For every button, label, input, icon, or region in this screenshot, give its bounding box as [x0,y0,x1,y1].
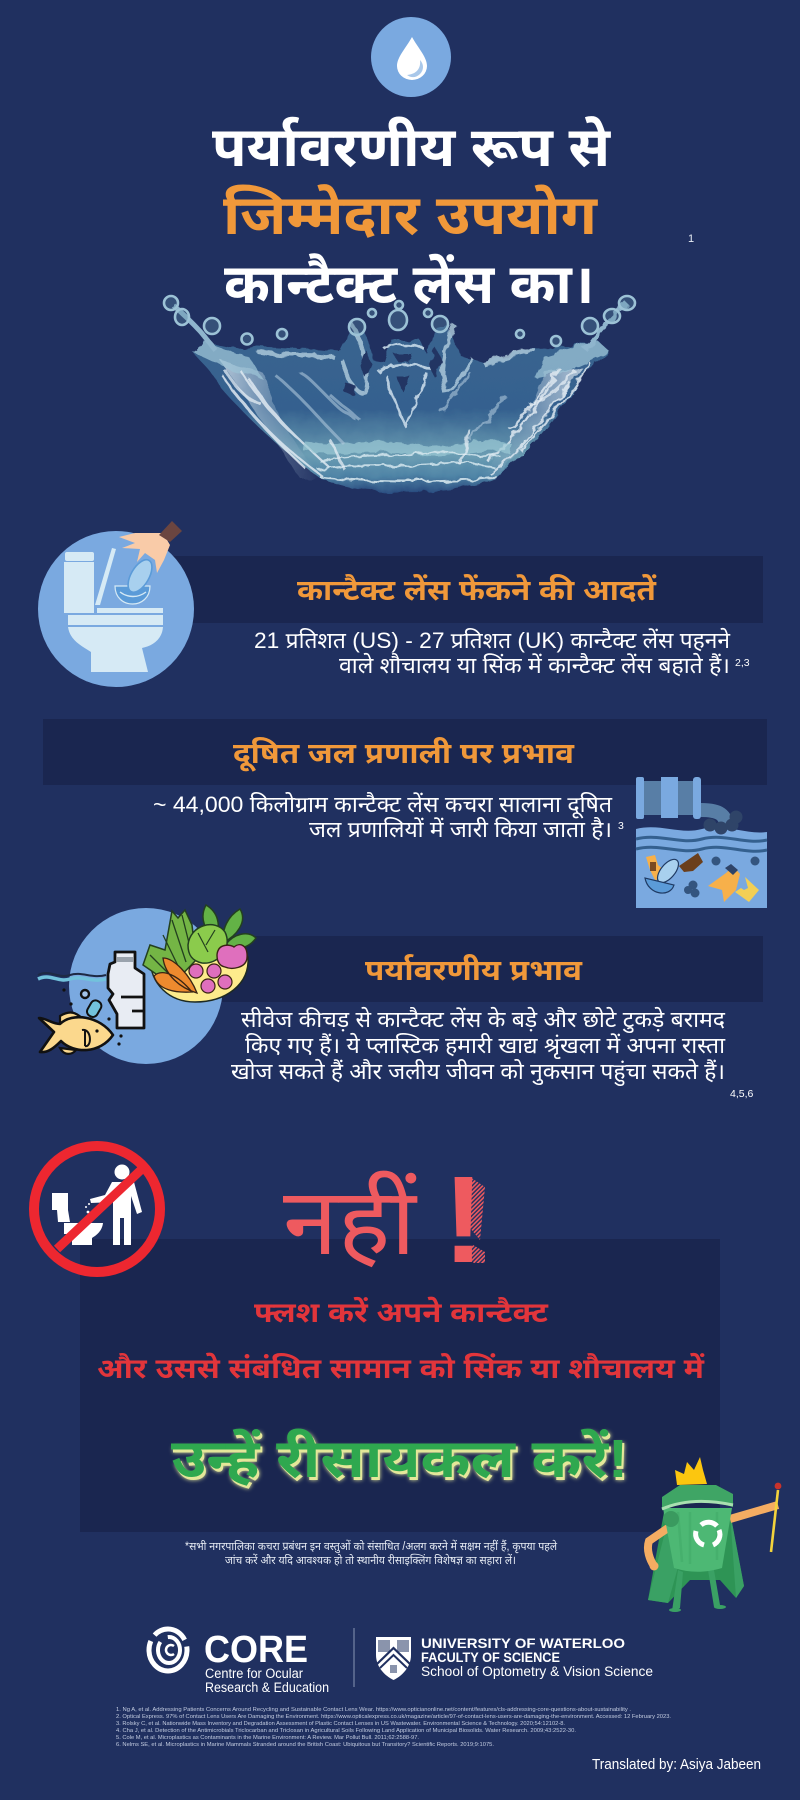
footnote marker 1: 1 [688,233,694,245]
references: 1. Ng A, et al. Addressing Patients Concerns Around Recycling and Sustainable Contact Lens Wear. https://www.opticianonline.net/content/features/cls-addressing-core-questions-about-sustainability . [116,1707,631,1713]
body text [254,627,750,678]
logo subtitle: Research & Education [205,1680,329,1695]
icon: recycling bin mascot [648,1457,781,1612]
heading: no [283,1152,485,1289]
shield crest [376,1637,411,1680]
logo wordmark: CORE [204,1629,308,1671]
icon: sewage pipe and debris [636,777,767,908]
title [212,116,611,315]
footnote disclaimer: *सभी नगरपालिका कचरा प्रबंधन इन वस्तुओं को संसाधित /अलग करने में सक्षम नहीं हैं, कृपया पहले [185,1539,557,1553]
panel: call to action [34,1146,720,1532]
body text [231,1006,754,1100]
image: water splash crown [164,296,635,492]
heading: पर्यावरणीय प्रभाव [365,954,583,987]
references: 3. Rolsky C, et al. Nationwide Mass Inventory and Degradation Assessment of Plastic Contact Lenses in US Wastewater. Environmental Science & Technology. 2020;54:12102-8. [116,1721,565,1727]
references: 6. Nelms SE, et al. Microplastics in Marine Mammals Stranded around the British Coast: Ubiquitous but Transitory? Scientific Reports. 2019;9:1075. [116,1742,494,1748]
university wordmark [421,1635,653,1679]
university wordmark: FACULTY OF SCIENCE [421,1649,560,1665]
logo: University of Waterloo [376,1635,653,1680]
university wordmark: School of Optometry & Vision Science [421,1663,653,1679]
logo mark [149,1629,187,1671]
footnote disclaimer [185,1539,557,1567]
heading: no: ! [443,1152,484,1289]
title: जिम्मेदार उपयोग [223,184,598,246]
heading: दूषित जल प्रणाली पर प्रभाव [233,737,575,772]
body text: सीवेज कीचड़ से कान्टैक्ट लेंस के बड़े और छोटे टुकड़े बरामद [241,1006,725,1034]
references: 5. Cole M, et al. Microplastics as Contaminants in the Marine Environment: A Review. Mar Pollut Bull. 2011;62:2588-97. [116,1735,419,1741]
text: do not flush [97,1295,705,1384]
body text [153,791,624,842]
text: recycle them: उन्हें रीसायकल करें! [173,1431,630,1492]
references: 2. Optical Express. 97% of Contact Lens Users Are Damaging the Environment. https://www.opticalexpress.co.uk/magazine/article/97-of-contact-lens-users-are-damaging-the-environment. Accessed: 12 February 2023. [116,1714,671,1720]
text: recycle them: उन्हें रीसायकल करें! [173,1431,630,1492]
body text: किए गए हैं। ये प्लास्टिक हमारी खाद्य श्रृंखला में अपना रास्ता [245,1032,725,1060]
text: do not flush: और उससे संबंधित सामान को सिंक या शौचालय में [97,1351,705,1384]
logo: CORE [149,1629,329,1695]
footnote disclaimer: जांच करें और यदि आवश्यक हो तो स्थानीय रीसाइक्लिंग विशेषज्ञ का सहारा लें। [225,1553,516,1567]
body text: 4,5,6 [730,1088,754,1100]
icon: no flushing sign [34,1146,160,1272]
logo subtitle [205,1666,329,1695]
title: पर्यावरणीय रूप से [212,116,611,178]
panel: environmental impact [38,905,763,1100]
translator credit: Translated by: Asiya Jabeen [592,1757,761,1773]
logo subtitle: Centre for Ocular [205,1666,303,1681]
heading: no: नहीं [283,1170,418,1274]
panel: disposal habits [38,521,763,687]
icon: water drop in circle [371,17,451,97]
body text: जल प्रणालियों में जारी किया जाता है। [309,816,612,842]
university wordmark: UNIVERSITY OF WATERLOO [421,1635,625,1651]
body text: ~ 44,000 किलोग्राम कान्टैक्ट लेंस कचरा सालाना दूषित [153,791,612,819]
icon: bottle, fish and vegetables [38,905,256,1064]
body text: खोज सकते हैं और जलीय जीवन को नुकसान पहुंचा सकते हैं। [231,1058,725,1086]
body text: वाले शौचालय या सिंक में कान्टैक्ट लेंस बहाते हैं। [339,652,730,678]
references: 4. Cha J, et al. Detection of the Antimicrobials Triclocarban and Triclosan in Agricultural Soils Following Land Application of Municipal Biosolids. Water Research. 2009;43:2522-30. [116,1728,576,1734]
body text: 21 प्रतिशत (US) - 27 प्रतिशत (UK) कान्टैक्ट लेंस पहनने [254,627,731,653]
text: recycle them: उन्हें रीसायकल करें! [171,1428,628,1489]
panel: wastewater impact [43,719,767,908]
body text: 2,3 [735,657,750,669]
body text: 3 [618,820,624,832]
icon: hand dropping lens in toilet [38,521,194,687]
references [116,1707,671,1748]
text: do not flush: फ्लश करें अपने कान्टैक्ट [254,1295,549,1328]
heading: कान्टैक्ट लेंस फेंकने की आदतें [297,573,657,607]
title: कान्टैक्ट लेंस का। [224,253,594,315]
